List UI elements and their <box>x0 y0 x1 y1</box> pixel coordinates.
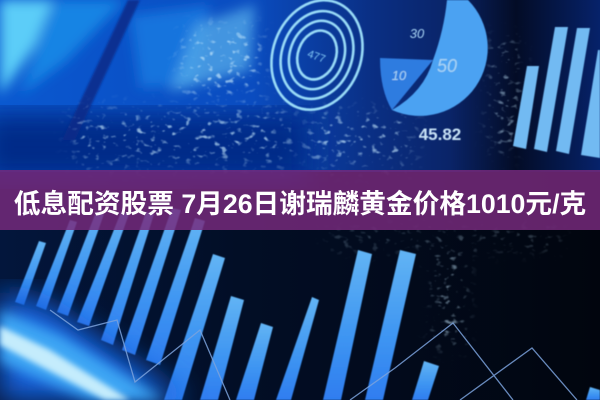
pie chart: 45.82 <box>419 125 461 144</box>
pie: light segment <box>392 0 488 116</box>
pie chart <box>380 0 488 144</box>
line chart <box>50 310 577 400</box>
title band <box>0 170 600 230</box>
scattered data speckle <box>60 18 562 354</box>
dial value: 477 <box>306 48 327 66</box>
pie chart: 10 <box>392 68 407 83</box>
bar chart: top right <box>513 27 600 158</box>
glow: top-left cyan light <box>0 0 255 95</box>
pie chart: 50 <box>437 56 457 76</box>
glow: bottom-left light beam <box>0 290 190 400</box>
pie labels: 30 <box>410 26 425 41</box>
dark diagonal streak <box>62 0 140 140</box>
title: 低息配资股票 7月26日谢瑞麟黄金价格1010元/克 <box>14 189 586 219</box>
pie: dark segment <box>380 58 433 110</box>
bar chart: large diagonal bars <box>15 208 600 400</box>
concentric ring dial <box>257 0 377 123</box>
